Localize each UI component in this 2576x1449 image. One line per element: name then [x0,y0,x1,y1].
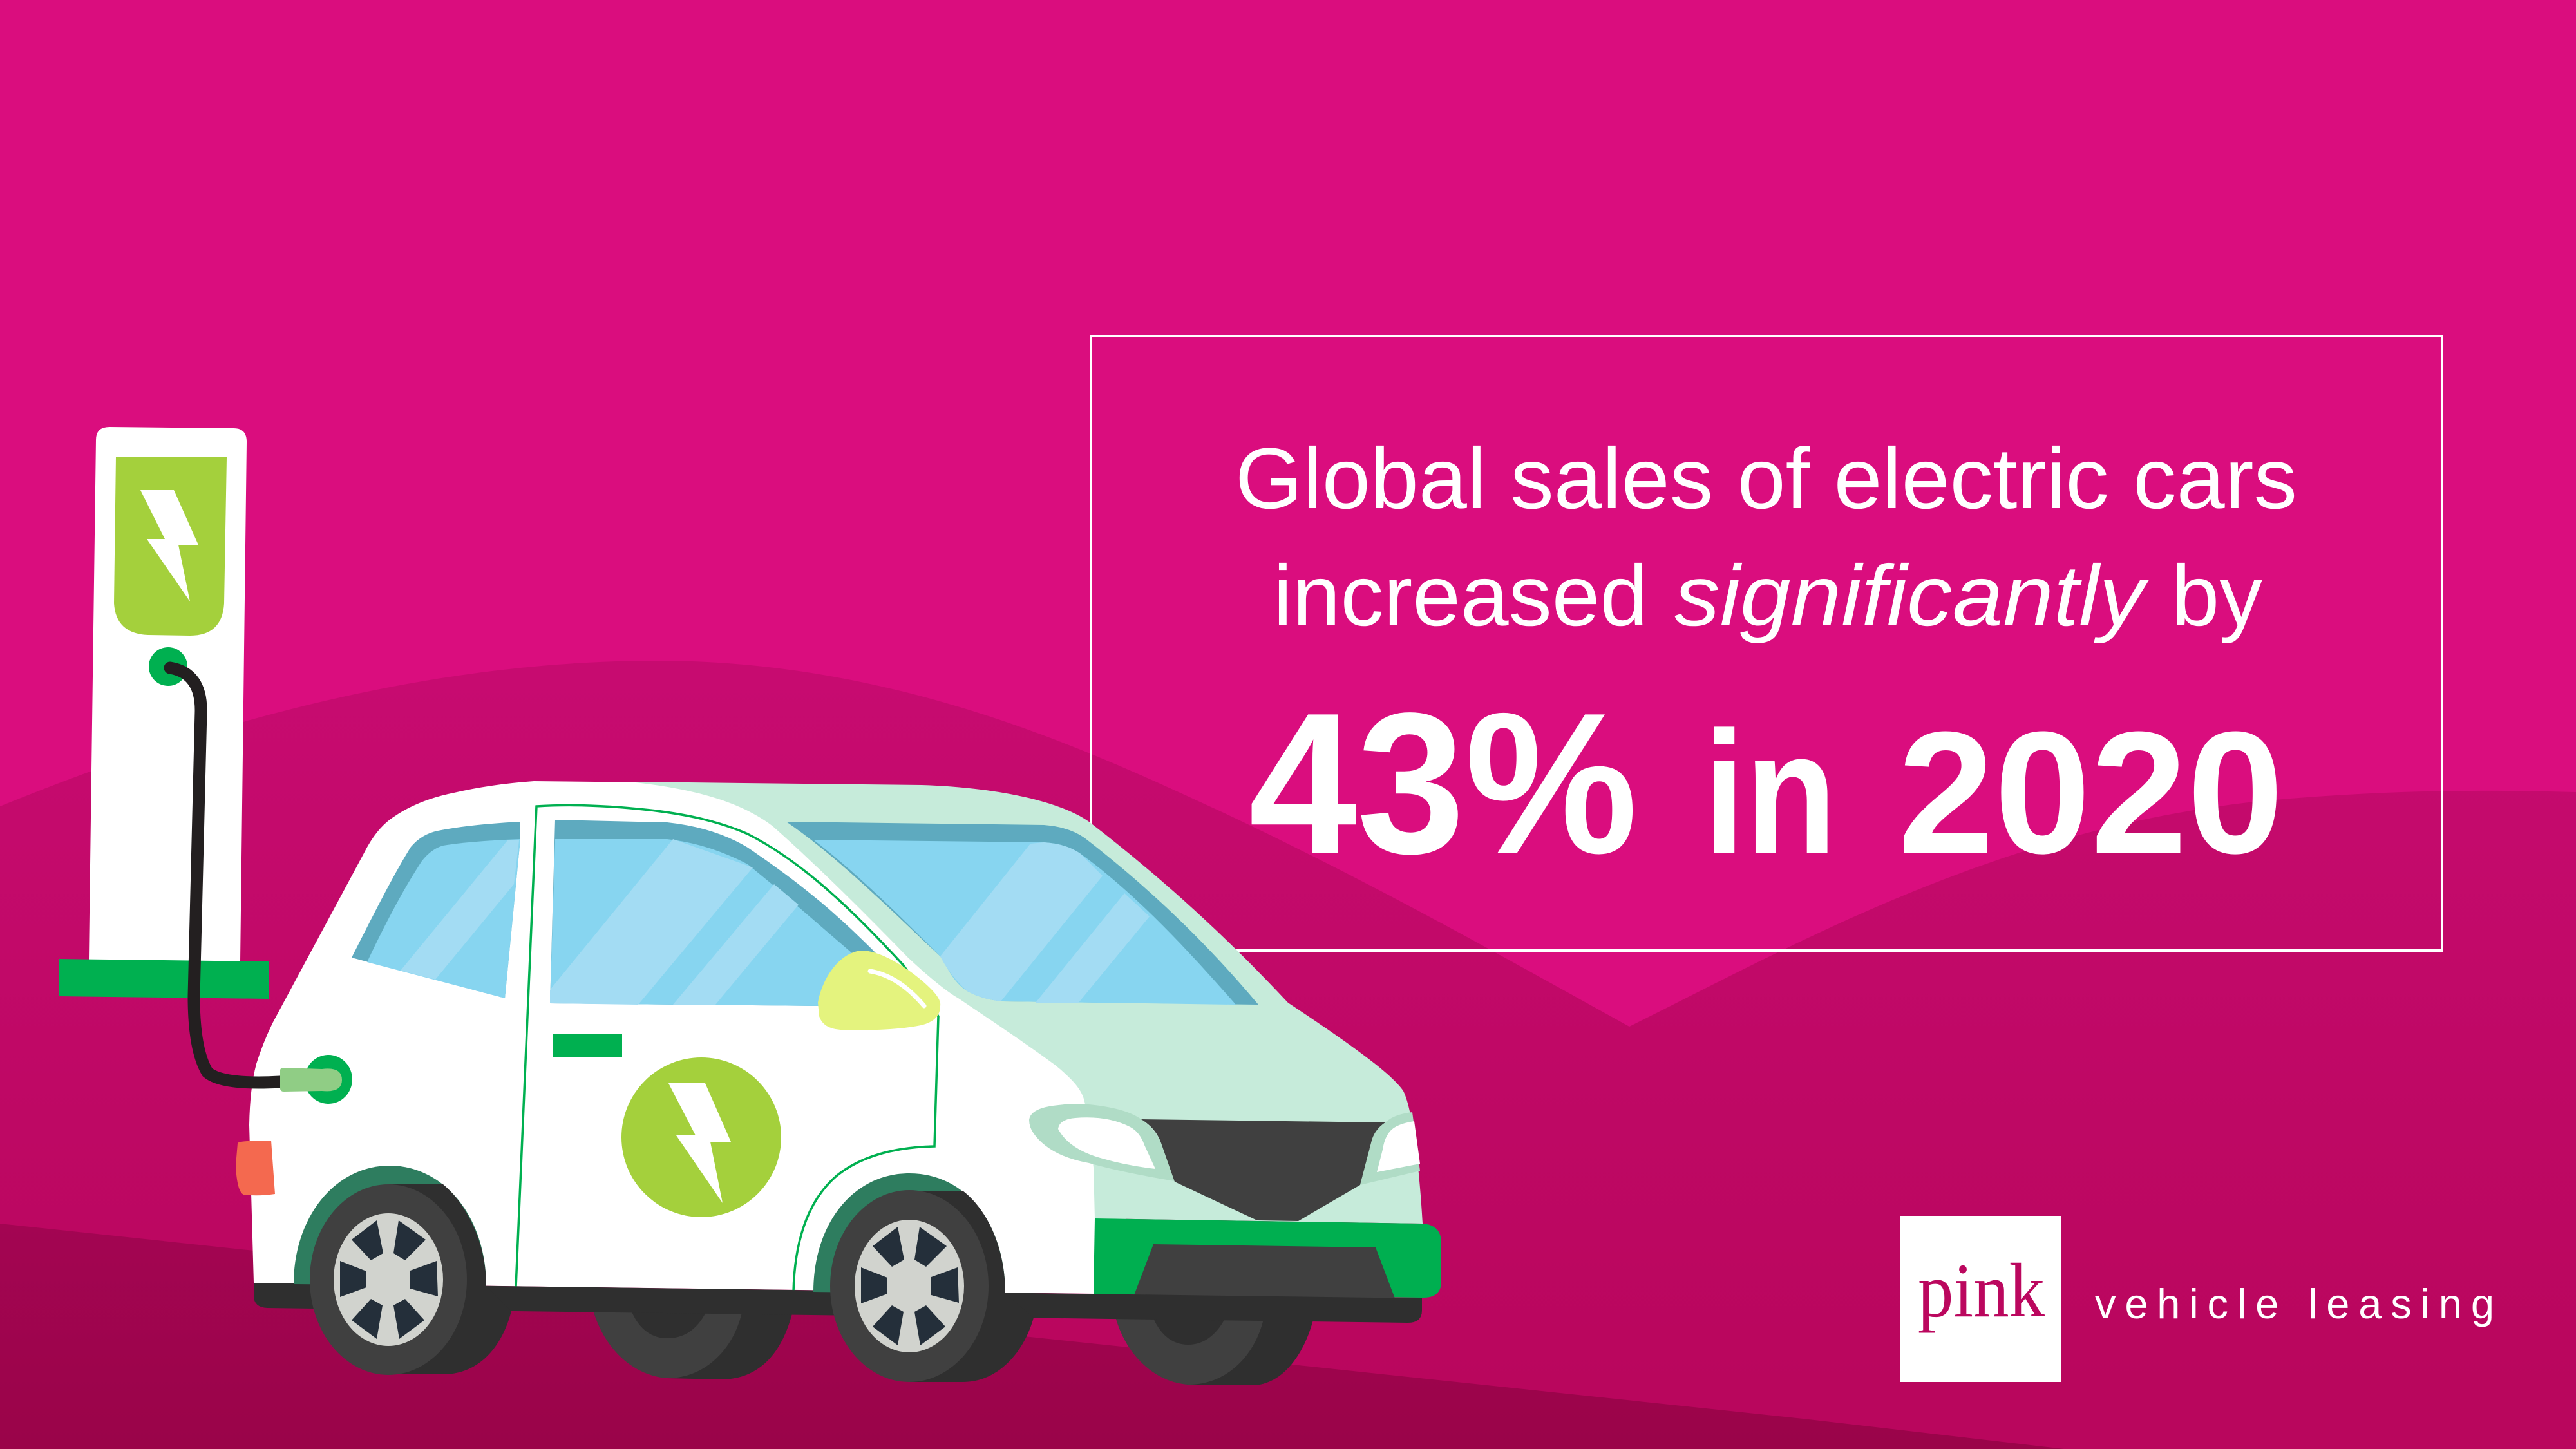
headline text: by [2172,548,2262,644]
door outline [516,805,938,1292]
headline text: increased [1273,548,1648,644]
bumper [1094,1218,1441,1298]
rear wheel [294,1166,511,1375]
logo: pink vehicle leasing: vehicle leasing [2095,1280,2494,1327]
windshield [786,822,1258,1005]
key statistic: in [1703,696,1837,890]
tail light [236,1141,275,1195]
left headlight [1029,1104,1175,1181]
front wheel [813,1173,1034,1382]
side mirror [818,951,940,1030]
text box outline [1091,336,2442,951]
charging cable and plug [170,668,352,1104]
rear window [352,822,520,998]
car [236,781,1441,1382]
headline text: significantly [1674,548,2149,644]
headline text: Global sales of electric cars [1235,431,2297,527]
headline text [1235,431,2297,644]
grille [1141,1119,1385,1221]
logo: pink vehicle leasing: pink [1918,1247,2045,1333]
key statistic: 43% [1249,672,1638,896]
logo: pink vehicle leasing [1900,1216,2494,1382]
door stripe [553,1034,622,1057]
key statistic [1249,672,2284,896]
right headlight [1360,1112,1420,1185]
far wheels [592,1307,1314,1385]
door window [550,820,882,1007]
key statistic: 2020 [1898,696,2284,890]
chassis [254,1283,1422,1323]
charging station [59,427,269,999]
door logo [621,1057,781,1217]
mint front panel [630,782,1423,1224]
car body [249,781,1127,1294]
